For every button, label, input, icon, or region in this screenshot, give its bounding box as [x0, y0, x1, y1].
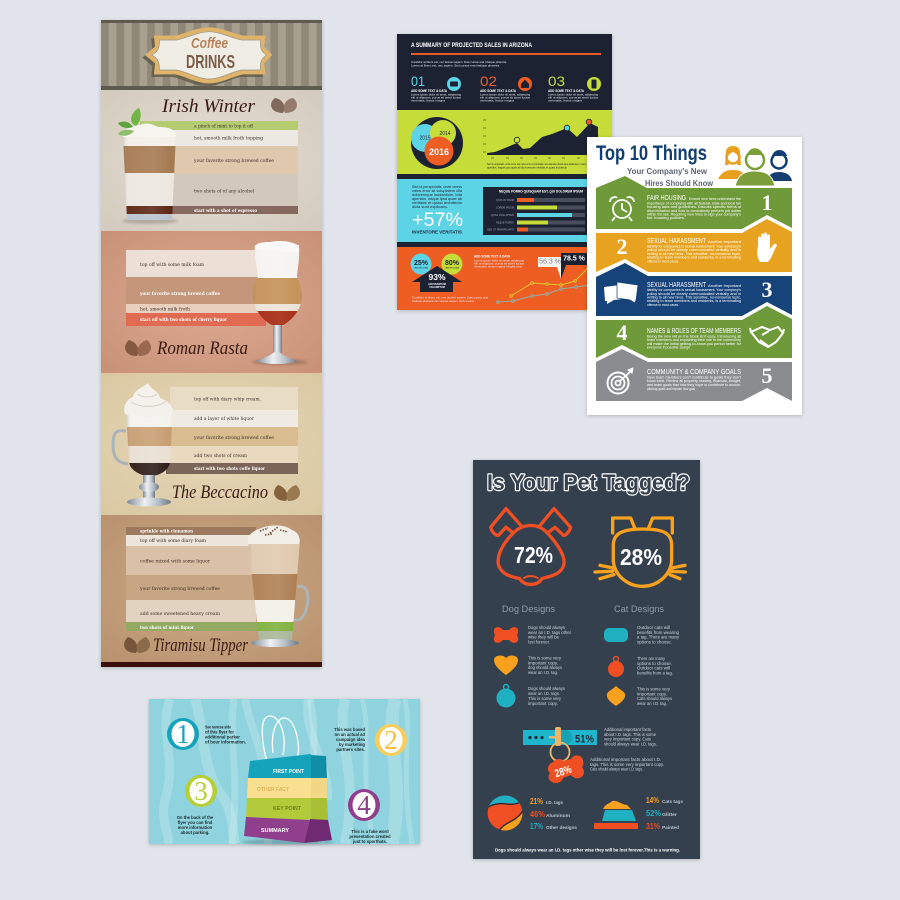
material stats: [530, 797, 577, 831]
icon: round tag: [608, 656, 624, 677]
text: Cats should always: [637, 696, 672, 701]
panel: Coffee Drinks poster: [101, 20, 322, 667]
text: dog should always: [528, 665, 562, 670]
text 4: This is a fake word: [351, 829, 389, 834]
text 2: by marketing: [339, 742, 365, 747]
badge 2: [375, 724, 407, 756]
badge 4: 4: [357, 790, 371, 820]
area chart: Sed ut perspiciatis, unde omnis iste natus error sit voluptatem accusantium doloremque laudantium, totam rem: [487, 162, 591, 166]
coffee title badge: [142, 27, 272, 86]
cat stats: 14%: [646, 796, 659, 805]
bar 5: Community and Company Goals: New team members can't contribute to goals they don't: [647, 376, 741, 380]
bar 2: Sexual Harassment: [596, 219, 792, 272]
cat stats: Cats tags: [662, 799, 683, 804]
text: [528, 656, 562, 675]
bar 3: Sexual Harassment: 3: [762, 277, 772, 302]
text 2: partners sites.: [336, 747, 365, 752]
bar 5: Community and Company Goals: 5: [762, 363, 772, 388]
bar 3: Sexual Harassment: liability for companies is sexual harassment. Your company's: [647, 288, 741, 292]
bag labels: OTHER FACT: [257, 787, 290, 793]
orange section: [397, 247, 612, 310]
venn chart by year: 2015: [419, 136, 431, 142]
badge 2: 2: [384, 725, 398, 755]
ingredient layers: coffee mixed with some liquor: [140, 560, 211, 564]
badge 3: 3: [194, 776, 208, 806]
icon: cat outline 28%: 28%: [620, 544, 662, 570]
text block: Lorem ipsum dolor sit amet, adipiscing: [474, 258, 524, 262]
bar 4: Names and Roles: Being the new kid on the block isn't easy. Introducing all: [647, 334, 741, 338]
ingredient layers: your favorite strong brewed coffee: [193, 159, 274, 164]
bar 1: Fair Housing: discrimination and how to consistently perform job duties: [647, 209, 741, 213]
bar chart panel: QUIS IN TRUM: [496, 198, 514, 202]
text: bone note: tags. This is some very important copy.: [590, 762, 664, 767]
heading: Top 10 Things: [596, 142, 707, 165]
bar 2: Sexual Harassment: Another important: [708, 240, 741, 244]
text: collar note: about I.D. tags. This is some: [604, 732, 657, 737]
bar chart panel: NEQUE PORRO: [496, 220, 514, 224]
top dark section: Curabitur at libero est, nec laoreet sapien. Duis cursus erat tristique pharetra.: [411, 60, 507, 64]
subheading: [627, 166, 713, 188]
bag front bands: [244, 754, 311, 843]
icon: bone tag: [494, 627, 518, 643]
arrow stat 93%: [412, 266, 462, 292]
text 1: See reverse side: [205, 724, 232, 730]
bar 4: Names and Roles: everyone if possible assign: [647, 346, 690, 350]
lime section: [397, 110, 612, 174]
bar 4: Names and Roles: NAMES & ROLES OF TEAM MEMBERS: [647, 328, 741, 335]
illustration: Irish coffee mug: [113, 383, 176, 506]
icon: alarm clock: [610, 197, 634, 221]
section: Roman Rasta: [101, 231, 322, 373]
text: This is some very: [528, 656, 562, 660]
divider strip: [397, 242, 612, 247]
text: Outdoor cats will: [637, 625, 670, 630]
stat 02: venenatis, lectus magna: [480, 98, 514, 102]
dog design list: [494, 625, 572, 708]
heading: Tiramisu Tipper: Tiramisu Tipper: [153, 635, 248, 656]
text 3: On the back of the: [177, 815, 214, 820]
panel: shopping bag flyer: [149, 699, 420, 845]
icon: coffee beans: [125, 340, 151, 356]
icon: coffee beans: [124, 637, 150, 653]
icon: rectangle tag: [604, 628, 628, 642]
text: bone note: Additional important facts about I.D.: [590, 757, 661, 762]
bar 2: Sexual Harassment: SEXUAL HARASSMENT: [647, 238, 707, 245]
ingredient layers: add two shots of cream: [194, 454, 248, 459]
text: [528, 625, 572, 644]
text 2: campaign idea: [336, 737, 366, 742]
text 2: This was based: [334, 727, 365, 732]
bar 2: Sexual Harassment: writing to all new hires. This sensitive, no-nonsense topic,: [647, 252, 741, 256]
icon: coffee beans: [274, 485, 300, 501]
text: [637, 686, 672, 706]
text 3: about parking.: [181, 830, 209, 835]
orange section: Curabitur at libero est, nec laoreet sapien. Duis cursus erat: [412, 296, 488, 300]
ingredient layers: [166, 387, 298, 474]
ingredient layers: [126, 527, 260, 631]
cat design list: [604, 625, 680, 706]
coffee header striped band: [101, 20, 322, 90]
collar graphic 51%: [523, 727, 597, 746]
text: Outdoor cats will: [637, 666, 670, 670]
ingredient layers: hot, smooth milk froth: [140, 308, 190, 312]
text: [637, 625, 680, 644]
heading: Irish Winter: Irish Winter: [161, 96, 256, 117]
section: The Beccacino: [101, 373, 322, 515]
stat 01: venenatis, lectus magna: [411, 98, 445, 102]
paragraph: [412, 185, 462, 209]
ingredient layers: start with two shots coffe liquor: [194, 467, 266, 472]
text: collar note: [604, 727, 657, 746]
bar 3: Sexual Harassment: policy should be clearly communicated verbally and in: [647, 292, 741, 296]
circle stat 25%: [410, 254, 432, 274]
text: wise they will be: [528, 634, 560, 640]
text: benefits from wearing: [637, 630, 680, 635]
coffee title badge: DRINKS: [186, 52, 235, 72]
ingredient layers: a pinch of mint to top it off: [194, 124, 254, 130]
panel: Is Your Pet Tagged poster: [473, 460, 700, 859]
bar 3: Sexual Harassment: Another important: [708, 284, 741, 288]
text 2: [334, 727, 366, 752]
stat 01: elit ut aliquam, purus sit amet luctus: [411, 96, 462, 100]
bar 3: Sexual Harassment: SEXUAL HARASSMENT: [647, 282, 707, 289]
icon: dog outline 72%: 72%: [514, 542, 553, 568]
bar 2: Sexual Harassment: relating to team members and residents, is a terminating: [647, 256, 741, 260]
paragraph: doloremque laudantium, tota: [412, 193, 462, 197]
text: important copy.: [637, 692, 667, 696]
text 3: [177, 815, 214, 835]
paragraph: veritatis et quasi architecto: [412, 201, 462, 205]
illustration: shopping bag: [242, 716, 334, 845]
circle stat 25%: 25%: [414, 260, 429, 267]
icon: pet food bowl: [594, 801, 638, 829]
stat 02: [480, 73, 532, 102]
text: Dogs should always: [528, 625, 565, 630]
bar 4: Names and Roles: 4: [616, 320, 628, 345]
heading: Roman Rasta: Roman Rasta: [156, 338, 248, 359]
text 3: more information: [178, 825, 213, 830]
stat 03: [548, 73, 601, 102]
text: wear an I.D. tag.: [637, 701, 667, 706]
bag handles: [262, 716, 298, 765]
area chart: aperiam, eaque ipsa quae ab illo inventore veritatis et quasi architecto: [487, 166, 567, 170]
subheading: Your Company's New: [627, 166, 707, 176]
bar 5: Community and Company Goals: [596, 349, 792, 401]
bag side panel: [304, 755, 332, 843]
heading: The Beccacino: The Beccacino: [172, 482, 268, 503]
ingredient layers: top off with some diary foam: [140, 539, 207, 544]
stat 01: 01: [411, 73, 425, 89]
material stats: 21%: [530, 797, 543, 806]
text: collar note: very important copy. Cats: [604, 736, 651, 742]
text: There are many: [637, 656, 666, 661]
text 4: just to sporthats.: [352, 839, 387, 844]
heading: Is Your Pet Tagged?: [487, 470, 690, 495]
wavy background stripes: [164, 699, 412, 844]
bar 5: Community and Company Goals: and team goals that how they hope to contribute to accom-: [647, 383, 741, 387]
icon: heart tag: [607, 686, 625, 706]
label: Dog Designs: Dog Designs: [502, 604, 555, 615]
text block: [474, 254, 525, 268]
paragraph: dicta sunt explicabo.: [412, 205, 448, 209]
text: This is some very: [637, 686, 671, 692]
stat 03: elit ut aliquam, purus sit amet luctus: [548, 96, 599, 100]
paragraph: Sed ut perspiciatis, unde omnis: [412, 185, 462, 189]
top dark section: Lorem at libero est, nec sapien. Sed cursus erat tristique pharetra.: [411, 64, 500, 68]
bar 1: Fair Housing: FAIR HOUSING: [647, 195, 686, 202]
panel: Arizona projected sales poster: [397, 34, 612, 310]
text: bone note: Cats should always wear I.D. tags.: [590, 766, 643, 772]
icon: tag material ball: [488, 796, 522, 830]
material stats: Other designs: [546, 825, 577, 830]
badge 4: [348, 789, 380, 821]
circle stat 80%: 80%: [445, 260, 460, 267]
ingredient layers: your favorite strong brewed coffee: [193, 436, 274, 441]
illustration: latte glass: [245, 525, 308, 647]
icon: speech bubbles: [604, 282, 638, 304]
stat 03: venenatis, lectus magna: [548, 98, 582, 102]
text: important copy.: [528, 660, 558, 666]
arrow stat 93%: ACCUSANTIUM: [428, 283, 446, 286]
ingredient layers: two shots of of any alcohol: [194, 190, 255, 194]
ingredient layers: your favorite strong brewed coffee: [139, 587, 220, 592]
stat 02: ADD SOME TEXT & DATA: [480, 89, 517, 93]
ingredient layers: your favorite strong brewed coffee: [139, 292, 220, 297]
bar chart panel: [483, 187, 612, 235]
text 1: of bour information.: [205, 740, 246, 744]
big stat: +57%: [412, 210, 463, 231]
cat stats: [646, 796, 683, 831]
ingredient layers: start with a shot of espresso: [194, 209, 257, 214]
footer warning: Dogs should always wear an I.D. tags other wise they will be lost forever.This is a warning.: [495, 848, 680, 852]
text 4: [349, 829, 391, 844]
venn chart by year: 2016: [429, 147, 449, 157]
text: [528, 686, 565, 706]
bar 3: Sexual Harassment: relating to team members and residents, is a terminating: [647, 299, 741, 303]
text: collar note: Additional important facts: [604, 727, 651, 732]
coffee title badge: Coffee: [191, 35, 228, 52]
bag labels: SUMMARY: [261, 828, 289, 834]
arrow stat 93%: VOLUMPTUM: [429, 286, 445, 289]
stat caption: INVENTORE VERITATIS: [412, 230, 462, 234]
top dark section: [397, 34, 612, 110]
text: benefits from a tag.: [637, 670, 673, 676]
bag labels: [257, 769, 305, 834]
line chart: [497, 268, 590, 303]
venn chart by year: [411, 117, 463, 169]
text: options to choose.: [637, 661, 672, 666]
bone tag 28%: [548, 742, 584, 783]
bar 3: Sexual Harassment: offense in most cases.: [647, 303, 679, 307]
bar 2: Sexual Harassment: 2: [616, 234, 628, 259]
text: [637, 656, 673, 676]
icon: round tag: [496, 684, 516, 708]
cat stats: Painted: [662, 825, 679, 830]
text: important copy.: [528, 701, 558, 706]
text: collar note: should always wear I.D. tags.: [604, 742, 657, 746]
text 2: on an actual ad: [335, 732, 365, 737]
ingredient layers: add some sweetened heavy cream: [140, 612, 221, 617]
material stats: I.D. tags: [546, 800, 563, 805]
text: wear an I.D. tags.: [528, 691, 560, 696]
section: Tiramisu Tipper: [101, 515, 322, 662]
bar 3: Sexual Harassment: writing to all new hires. This sensitive, no-nonsense topic,: [647, 296, 741, 300]
subheading: Hires Should Know: [645, 178, 713, 188]
bar chart panel: QUIA VOLUPTAS: [491, 213, 514, 217]
text: lost forever.: [528, 640, 550, 644]
label: Cat Designs: Cat Designs: [614, 604, 664, 615]
bar 1: Fair Housing: within the law. Requiring new hires to sign your company's: [647, 212, 741, 216]
icon: team people: [718, 146, 792, 186]
orange section: tristique pharetra nec laoreet sapien. Duis cursus: [412, 299, 475, 303]
ingredient layers: sprinkle with cinnamon: [140, 530, 194, 534]
bar 2: Sexual Harassment: liability for companies is sexual harassment. Your company's: [647, 244, 741, 248]
panel: Top 10 Things poster: [587, 137, 802, 415]
ingredient layers: top off with some milk foam: [140, 263, 205, 268]
text block: elit ut aliquam, purus sit amet luctus: [474, 262, 525, 266]
bar 1: Fair Housing: housing laws and guidelines. Discuss specific forms of: [647, 205, 741, 209]
bar chart panel: SED UT PERSPICIATIS: [487, 228, 514, 232]
text: options to choose.: [637, 640, 672, 644]
bar 1: Fair Housing: fair housing policies.: [647, 216, 685, 220]
illustration: Irish glass with mint: [118, 108, 180, 224]
bar 1: Fair Housing: Ensure new hires understand the: [689, 197, 741, 201]
text 3: flyer you can find: [178, 820, 213, 825]
divider strip: [397, 174, 612, 179]
material stats: Aluminum: [546, 813, 570, 818]
cyan section: [397, 179, 612, 242]
icon: target: [608, 368, 633, 394]
stat 02: elit ut aliquam, purus sit amet luctus: [480, 96, 531, 100]
ingredient layers: [126, 250, 266, 326]
bar 5: Community and Company Goals: plishing goals and explain how goal: [647, 387, 695, 391]
text block: venenatis, lectus magna fringilla urna: [474, 264, 522, 268]
text 1: of this flyer for: [205, 730, 234, 734]
circle stat 25%: LABORIOSAM: [414, 266, 428, 270]
text: Dogs should always: [528, 686, 565, 691]
icon: coffee beans: [271, 98, 297, 113]
text: This is some very: [528, 696, 562, 701]
ingredient layers: add a layer of white liquor: [194, 417, 255, 422]
stat 02: Lorem ipsum dolor sit amet, adipiscing: [480, 92, 530, 96]
bar chart panel: LOREM IPSUM: [496, 206, 514, 210]
circle stat 80%: [442, 254, 462, 274]
text: bone note: [590, 757, 664, 772]
badge 1: 1: [176, 719, 190, 749]
paragraph: natus error sit voluptatem ulla: [412, 189, 462, 193]
bar 5: Community and Company Goals: know exist. Review all property, leasing, financial, budget,: [647, 379, 741, 383]
text: a tag. There are many: [637, 634, 680, 640]
badge 3: [185, 775, 217, 807]
stat 01: Lorem ipsum dolor sit amet, adipiscing: [411, 92, 461, 96]
collar graphic 51%: 51%: [575, 734, 594, 746]
heading: A SUMMARY OF PROJECTED SALES IN ARIZONA: [411, 43, 533, 49]
material stats: 17%: [530, 822, 543, 831]
bar 2: Sexual Harassment: offense in most cases.: [647, 260, 679, 264]
bar 4: Names and Roles: will make the initial getting-to-know-you period better for: [647, 342, 742, 346]
badge 1: [167, 718, 199, 750]
text 4: presentation created: [349, 834, 391, 839]
icon: dog outline 72%: [491, 509, 571, 584]
cat stats: 52%: [646, 809, 661, 818]
stat 02: 02: [480, 73, 497, 89]
bar 5: Community and Company Goals: COMMUNITY & COMPANY GOALS: [647, 369, 741, 376]
arrow stat 93%: 93%: [428, 272, 446, 282]
stat 03: ADD SOME TEXT & DATA: [548, 89, 585, 93]
bar 2: Sexual Harassment: policy should be clearly communicated verbally and in: [647, 248, 741, 252]
stat 01: ADD SOME TEXT & DATA: [411, 89, 448, 93]
bar 1: Fair Housing: importance of complying with all federal, state and local fair: [647, 202, 742, 206]
bar chart panel: NEQUE PORRO QUISQUAM EST, QUI DOLOREM IPSUM: [499, 190, 583, 194]
illustration: hurricane glass: [250, 241, 308, 365]
cat stats: 31%: [646, 822, 660, 831]
callout 78.5%: [561, 253, 587, 279]
callout 78.5%: 78.5 %: [563, 256, 586, 262]
ingredient layers: hot, smooth milk froth topping: [194, 136, 263, 142]
bar 1: Fair Housing: 1: [762, 190, 772, 215]
icon: heart tag: [494, 656, 518, 675]
text block: ADD SOME TEXT & DATA: [474, 254, 511, 258]
bar 3: Sexual Harassment: [596, 263, 792, 316]
bar 4: Names and Roles: team members and explaining their role in the community: [647, 338, 741, 342]
bag labels: FIRST POINT: [273, 769, 305, 775]
cat stats: Glitter: [662, 812, 677, 817]
text: wear an I.D. tags other: [528, 630, 572, 635]
material stats: 46%: [530, 810, 545, 819]
bone tag 28%: 28%: [553, 764, 573, 780]
ingredient layers: top off with diary whip cream.: [194, 398, 261, 402]
ingredient layers: [140, 121, 298, 214]
coffee footer strip: [101, 662, 322, 667]
stat 03: 03: [548, 73, 565, 89]
stat 01: [411, 73, 462, 102]
text 1: [205, 724, 246, 744]
icon: cat outline 28%: [595, 518, 685, 586]
callout 56.3%: 56.3 %: [539, 258, 561, 266]
icon: hand: [757, 232, 777, 262]
text 1: additional parker: [205, 734, 240, 740]
paragraph: aperiam, eaque ipsa quae ab: [412, 197, 462, 201]
area chart: [483, 119, 598, 170]
text: wear an I.D. tag.: [528, 670, 558, 675]
ingredient layers: start off with two shots of cherry liquor: [140, 318, 228, 323]
bar 4: Names and Roles: [596, 306, 792, 358]
ingredient layers: two shots of mint liquor: [140, 626, 195, 631]
icon: handshake: [750, 327, 784, 347]
venn chart by year: 2014: [439, 131, 451, 137]
bar 1: Fair Housing: [596, 176, 792, 229]
callout 56.3%: [538, 257, 561, 279]
section: Irish Winter: [101, 90, 322, 231]
stat 03: Lorem ipsum dolor sit amet, adipiscing: [548, 92, 598, 96]
circle stat 80%: LABORIOSAM: [445, 266, 459, 270]
bag labels: KEY POINT: [273, 806, 302, 812]
